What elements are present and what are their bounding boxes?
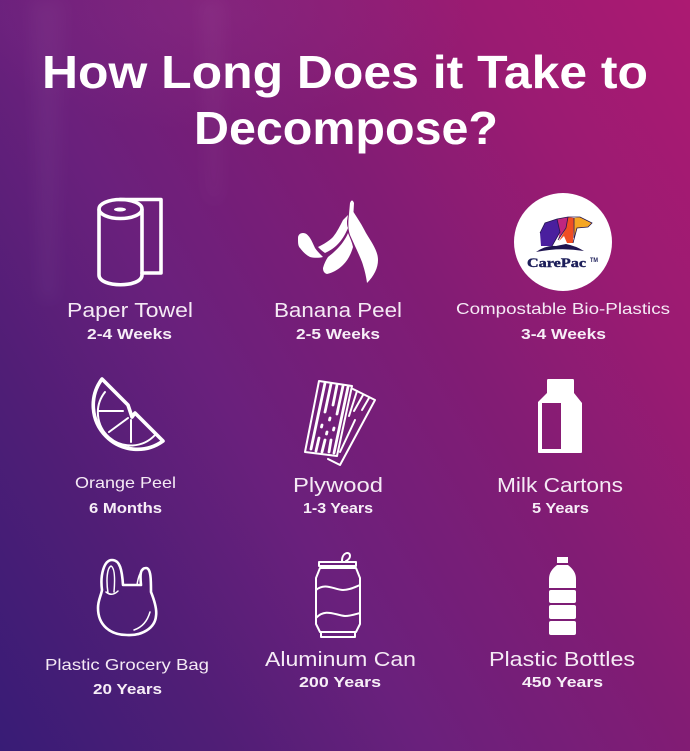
panel: banana peel [274,200,402,343]
panel: aluminum can [265,553,416,691]
title [42,46,648,154]
logo: CarePac bear: CarePac [527,255,586,270]
label: plywood: Plywood [293,475,383,497]
time: 200 years: 200 Years [299,674,381,691]
label: orange peel: Orange Peel [75,475,176,492]
panel: plywood [293,381,383,517]
panel: orange peel [75,379,176,517]
panel: plastic grocery bag [45,560,209,698]
panel: plastic bottles [489,557,635,691]
panel: paper towel [67,200,193,343]
icon: milk carton [538,379,582,453]
icon: aluminum can [316,553,360,637]
title: Decompose? [194,102,498,154]
panel: milk cartons [497,379,623,517]
title: How Long Does it Take to [42,46,648,98]
icon: banana peel [298,200,378,283]
label: plastic grocery bag: Plastic Grocery Bag [45,657,209,674]
icon: plastic bag [98,560,156,635]
time: 3-4 weeks: 3-4 Weeks [521,326,606,343]
label: plastic bottles: Plastic Bottles [489,649,635,671]
time: 20 years: 20 Years [93,681,162,698]
logo: CarePac bear [514,193,612,291]
label: aluminum can: Aluminum Can [265,649,416,671]
time: 2-4 weeks: 2-4 Weeks [87,326,172,343]
time: 1-3 years: 1-3 Years [303,500,373,517]
icon: plastic bottle [549,557,576,635]
label: banana peel: Banana Peel [274,300,402,322]
icon: paper towel roll [99,200,161,285]
label: paper towel: Paper Towel [67,300,193,322]
time: 2-5 weeks: 2-5 Weeks [296,326,380,343]
icon: plywood boards [305,381,375,465]
time: 5 years: 5 Years [532,500,589,517]
label: compostable bio-plastics: Compostable Bio-Plastics [456,301,670,318]
time: 6 months: 6 Months [89,500,162,517]
time: 450 years: 450 Years [522,674,603,691]
panel: compostable bio-plastics [456,193,670,343]
label: milk cartons: Milk Cartons [497,475,623,497]
icon: orange slice [93,379,163,449]
logo: CarePac bear: TM [590,258,598,264]
